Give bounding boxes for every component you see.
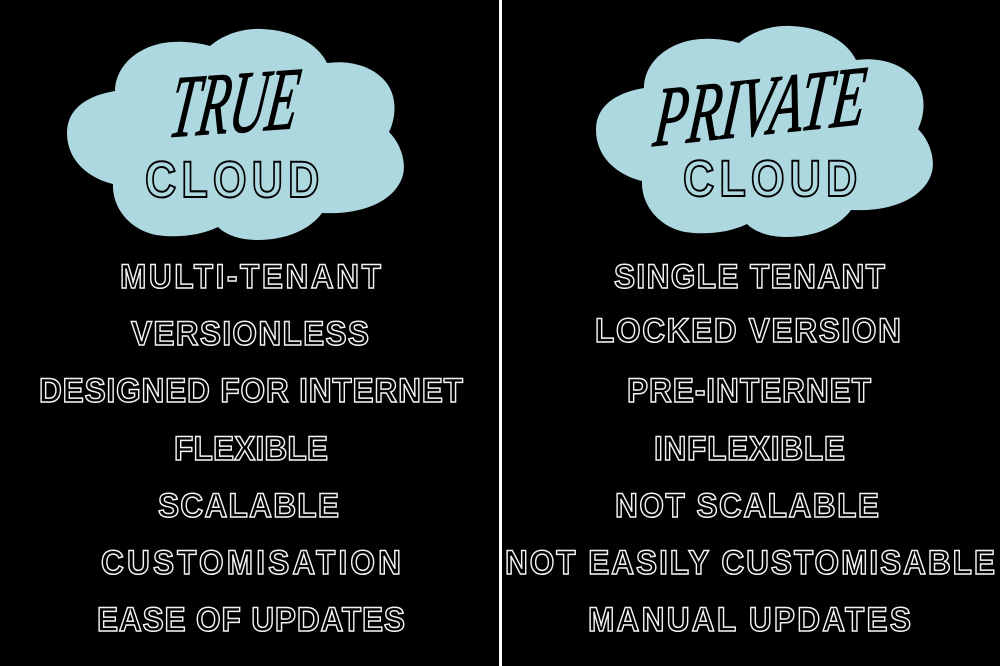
feature: pre-internet: PRE-INTERNET — [627, 371, 871, 409]
feature: multi-tenant: MULTI-TENANT — [120, 257, 381, 295]
heading: cloud: CLOUD — [683, 151, 857, 208]
panel: true cloud features — [39, 257, 463, 638]
feature: not easily customisable: NOT EASILY CUSTOMISABLE — [505, 543, 995, 581]
feature: inflexible: INFLEXIBLE — [654, 429, 845, 467]
panel: true cloud — [67, 29, 404, 240]
feature: designed for internet: DESIGNED FOR INTERNET — [39, 371, 463, 409]
feature: customisation: CUSTOMISATION — [101, 543, 401, 581]
heading: cloud: CLOUD — [145, 152, 319, 209]
icon: true cloud shape — [67, 29, 404, 240]
heading: true: TRUE — [164, 50, 306, 157]
panel: private cloud — [596, 26, 933, 237]
feature: single tenant: SINGLE TENANT — [614, 257, 885, 295]
feature: ease of updates: EASE OF UPDATES — [97, 600, 405, 638]
feature: manual updates: MANUAL UPDATES — [588, 600, 911, 638]
feature: not scalable: NOT SCALABLE — [615, 486, 879, 524]
feature: versionless: VERSIONLESS — [131, 314, 369, 352]
heading: private: PRIVATE — [649, 48, 871, 165]
feature: scalable: SCALABLE — [158, 486, 339, 524]
panel: private cloud features — [505, 257, 995, 638]
feature: locked version: LOCKED VERSION — [595, 311, 901, 349]
icon: private cloud shape — [596, 26, 933, 237]
feature: flexible: FLEXIBLE — [174, 429, 328, 467]
